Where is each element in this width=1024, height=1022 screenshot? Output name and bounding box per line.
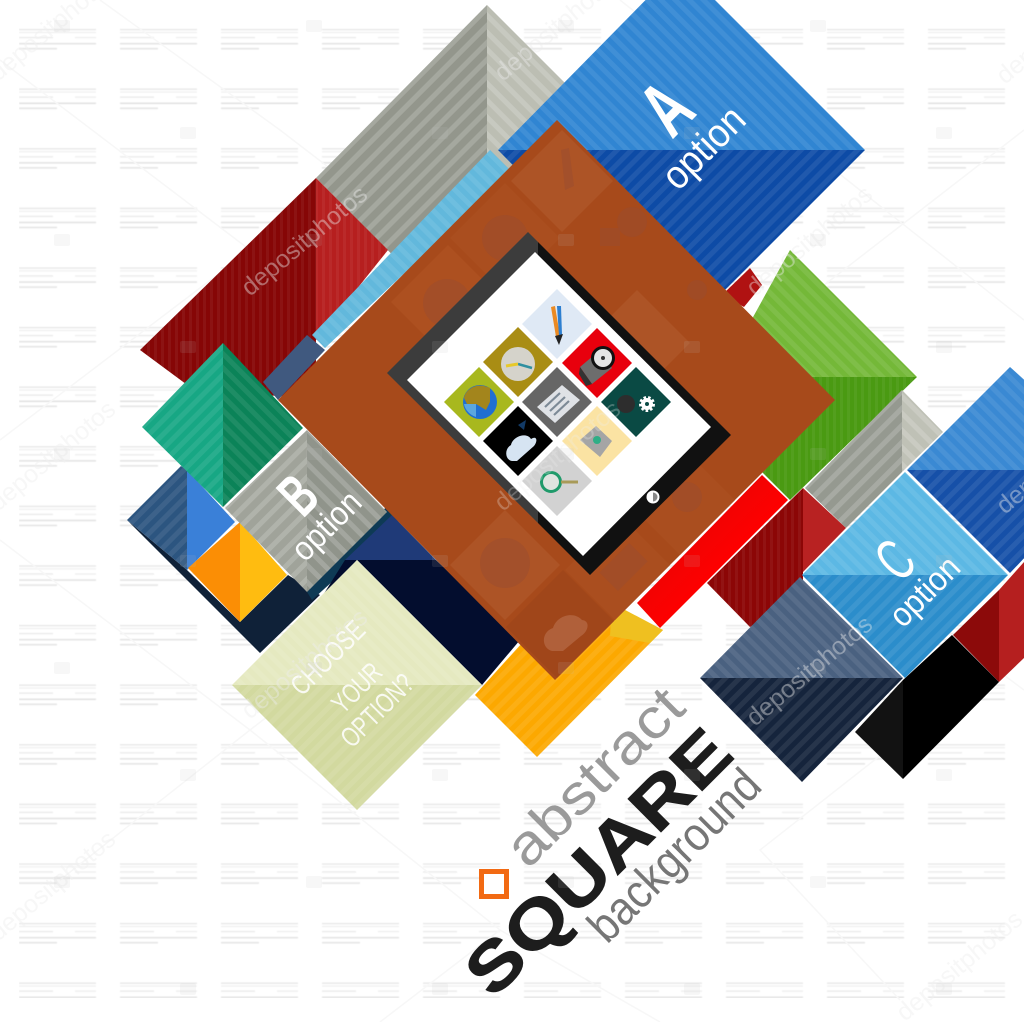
panel: teal strip between gray and cream [307,505,400,600]
panel: cream diamond [232,560,482,810]
panel: dark red diamond [140,178,388,400]
panel: navy bottom right diamond [700,577,903,782]
label: option C: option [882,548,968,635]
panel: blue option A diamond [498,0,865,335]
panel: gray option B diamond [225,430,387,592]
label: option A [622,64,754,198]
watermarks: depositphotos [236,180,373,302]
label: choose your option [284,614,420,753]
icon: clock [483,327,553,397]
icon: pencil [522,289,592,359]
icon: gears [601,367,671,437]
panel: left blue diamond [127,466,235,570]
panel: red right piece [953,562,1024,682]
panel: central brown diamond [278,120,835,684]
panel: red strip [637,475,788,628]
panel: dark red right diamond [707,488,846,627]
label: option A: option [653,97,754,198]
panel: orange diamond [475,590,663,757]
panel: light blue strip [312,150,512,348]
icon: camera [562,328,632,398]
panel: gray right diamond [805,390,943,528]
icon: circuit chip [562,406,632,476]
watermarks: depositphotos [741,610,878,732]
title: abstract square background: SQUARE [450,714,747,1011]
label: option B [265,462,369,569]
label: option A: A [622,64,710,152]
tablet device [387,232,731,575]
title: abstract square background [450,674,771,1011]
panel: slate small piece [263,335,325,400]
panel: navy right of B [320,515,520,685]
label: choose your option: YOUR [325,656,388,719]
panel: black diamond [855,635,999,779]
panel: teal diamond [142,343,303,507]
icon: cloud [483,406,553,476]
panel: small dark red piece [722,268,762,307]
tablet screen [407,252,711,556]
label: choose your option: OPTION? [334,668,420,753]
panel: orange small diamond [188,522,287,622]
icon: magnifier [522,446,592,516]
icon: globe chart [444,367,514,437]
label: option C: C [862,527,928,593]
panel: green diamond [720,250,917,500]
watermarks: depositphotos [236,603,373,725]
label: option B: option [284,483,369,569]
watermarks: depositphotos [489,395,626,517]
panel: dark navy lower left [127,520,320,653]
title: abstract square background: abstract [492,674,697,878]
label: option C [862,527,968,635]
tablet button [646,490,660,504]
icon: document [522,367,592,437]
title: abstract square background: background [577,758,771,952]
watermarks: depositphotos [741,180,878,302]
ghost icon tiles on brown [423,130,735,678]
label: choose your option: CHOOSE [284,614,371,701]
panel: gray top diamond [316,5,660,350]
panel: blue right diamond [907,367,1024,573]
panel: light blue option C diamond [802,472,1008,678]
label: option B: B [265,462,331,528]
icon: orange square outline [482,872,506,896]
